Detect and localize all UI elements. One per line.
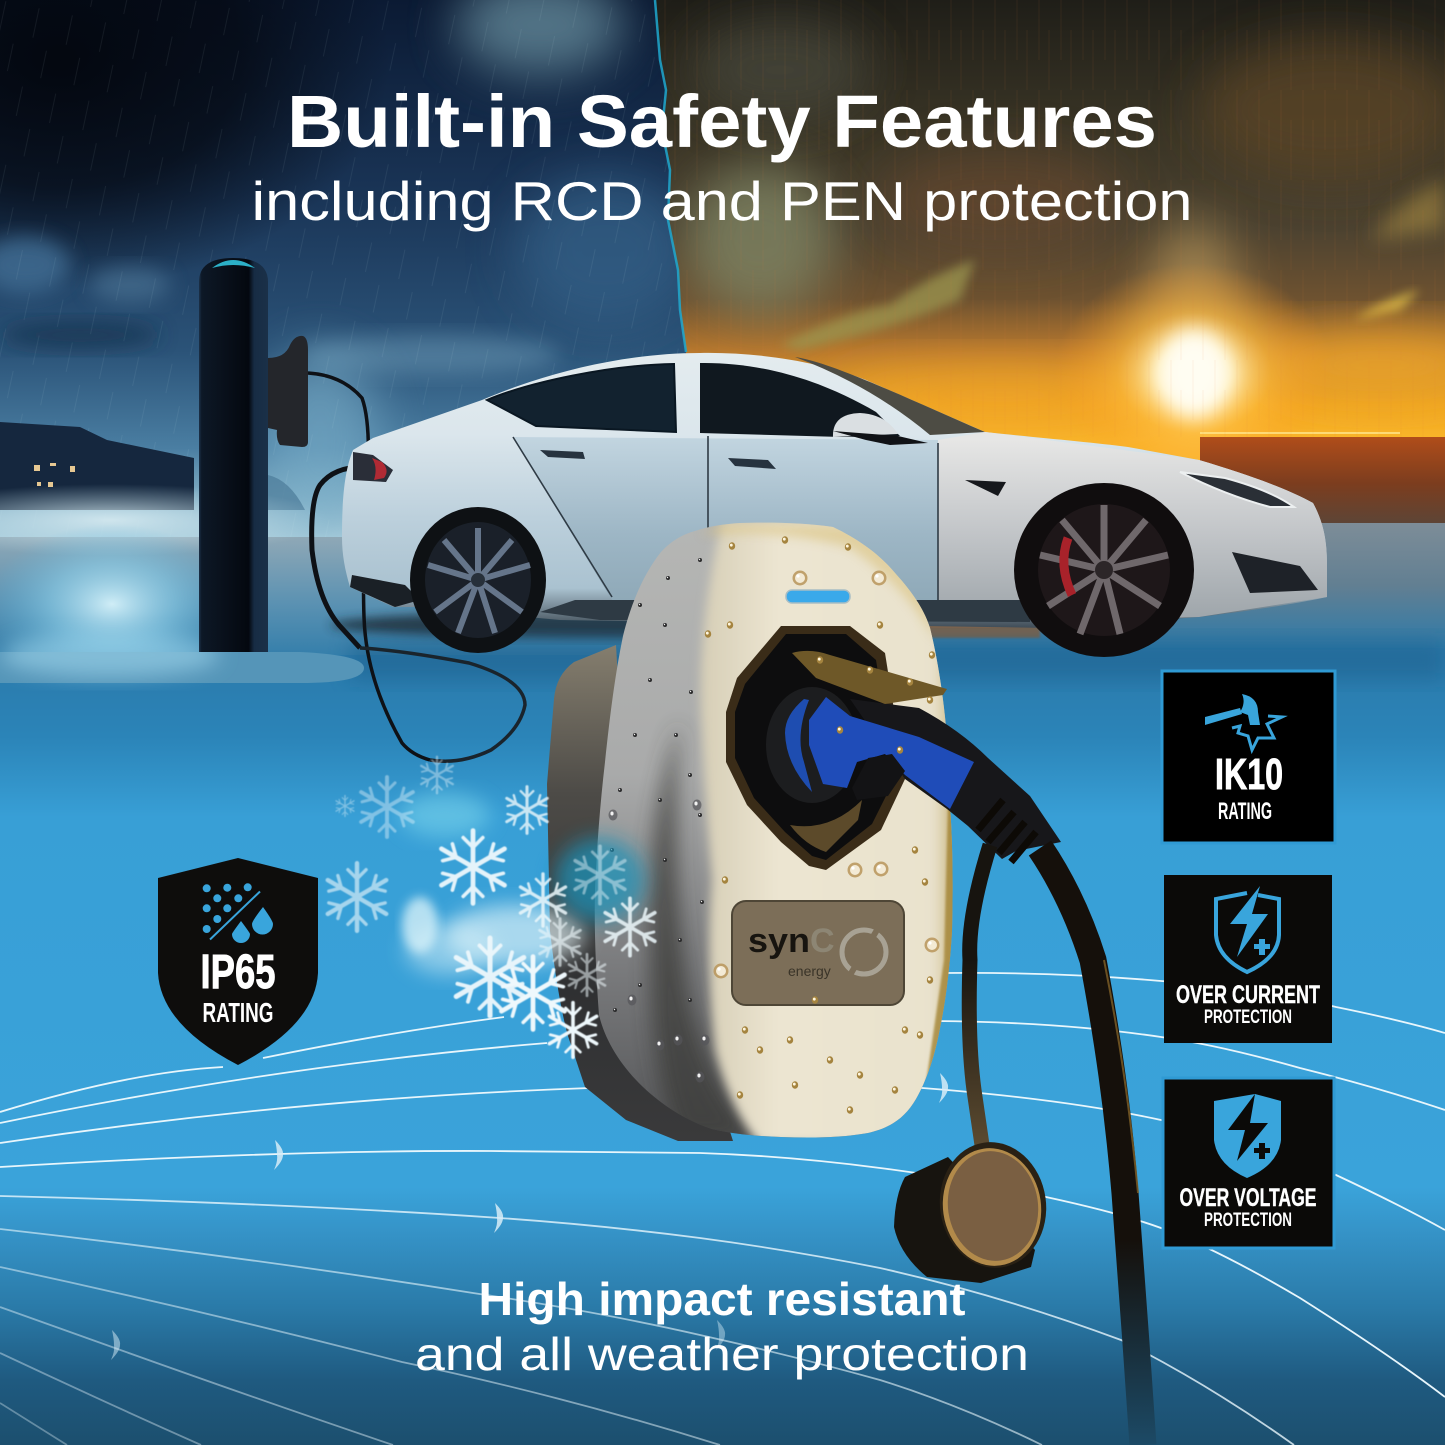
main charging cable: [1040, 848, 1143, 1445]
wing mirror: [833, 413, 928, 445]
logo plate: C: [810, 922, 835, 960]
side vent: [965, 480, 1006, 496]
snowflake burst: [328, 757, 655, 1057]
flow lines on the water: [0, 973, 1445, 1445]
connector cap: [894, 1135, 1054, 1283]
status LED: [786, 590, 850, 603]
rear wheel: [410, 507, 546, 653]
panel: over current protection: [1164, 875, 1332, 1043]
front wing and nose: [938, 432, 1327, 622]
cable strain relief ribs: [978, 800, 1036, 862]
door seams: [513, 436, 938, 600]
background: mist: [0, 484, 330, 556]
divider: cyan torn edge between skies: [655, 0, 686, 352]
icon: filled shield with bolt: [1214, 1094, 1281, 1178]
flow arrows: [111, 1073, 948, 1360]
panel: over voltage protection: OVER VOLTAGE: [1180, 1184, 1316, 1212]
side window: [700, 363, 900, 437]
cap tether cable: [969, 845, 990, 1145]
charging cables from post to car: [308, 373, 525, 761]
panel: IK10 rating: IK10: [1215, 750, 1283, 799]
windscreen strip: [795, 357, 985, 435]
socket recess: [726, 626, 905, 870]
background: horizon transition into water: [350, 640, 1445, 680]
tail light: [353, 452, 393, 482]
logo plate: syn: [748, 922, 810, 960]
post column: [199, 258, 268, 652]
IP65 shield badge: [158, 858, 318, 1065]
front grille: [1232, 552, 1318, 593]
panel: over voltage protection: [1163, 1078, 1334, 1248]
rear window: [487, 364, 676, 432]
connector blue ring: [785, 699, 812, 792]
front wheel: [1014, 483, 1194, 657]
background: floor glow near post: [0, 524, 237, 684]
background: water surface: [0, 640, 1445, 1445]
socket flap: [792, 651, 947, 704]
connector thumb grip: [852, 754, 905, 800]
headline: Built-in Safety Features: [287, 80, 1157, 163]
socket interior: [735, 634, 895, 860]
background: car shadow on ground: [330, 611, 910, 639]
subheadline: including RCD and PEN protection: [252, 170, 1192, 232]
logo plate: energy: [788, 963, 831, 979]
panel: IK10 rating: RATING: [1218, 798, 1272, 825]
headlight: [1180, 472, 1294, 507]
door handles: [540, 450, 776, 469]
logo plate: [732, 901, 904, 1005]
electric car: [342, 353, 1327, 657]
bottom tagline: High impact resistant: [478, 1273, 966, 1325]
icon: outlined shield with bolt: [1216, 886, 1279, 972]
cable highlight: [1104, 960, 1138, 1193]
icon: hammer and impact: [1205, 694, 1282, 750]
panel: over current protection: OVER CURRENT: [1176, 981, 1320, 1009]
background: sunset sky: [650, 0, 1445, 540]
bottom tagline: [415, 1273, 1029, 1380]
wall unit on post: [268, 336, 308, 447]
background: car reflection on ground: [925, 620, 1040, 638]
post base plate: [0, 652, 364, 683]
IP65 shield badge: RATING: [202, 997, 274, 1028]
panel: IK10 rating: [1162, 671, 1335, 843]
background: stormy night sky: [0, 0, 700, 540]
charging post: [0, 258, 364, 683]
panel: over voltage protection: PROTECTION: [1204, 1210, 1292, 1231]
rear under bumper: [350, 575, 420, 607]
connector blue grip: [809, 697, 974, 809]
charger rear housing: [547, 645, 733, 1141]
door panels: [513, 437, 938, 600]
connector black handle: [850, 699, 1061, 859]
bottom tagline: and all weather protection: [415, 1328, 1029, 1380]
body shading and cream face: [649, 520, 960, 1145]
charger body: [595, 523, 953, 1138]
background: distant hills with lights: [0, 422, 305, 510]
background: wet ground left: [0, 537, 930, 655]
panel: over current protection: PROTECTION: [1204, 1007, 1292, 1028]
icon: dust and water: [203, 883, 273, 943]
IP65 shield badge: IP65: [200, 946, 276, 999]
sill: [540, 600, 1030, 622]
socket inner ring: [766, 687, 858, 803]
wallbox charger: [547, 520, 1061, 1145]
socket lower tan reflection: [790, 800, 862, 852]
water droplets: [608, 536, 940, 1114]
background: wet ground right: [930, 523, 1445, 648]
